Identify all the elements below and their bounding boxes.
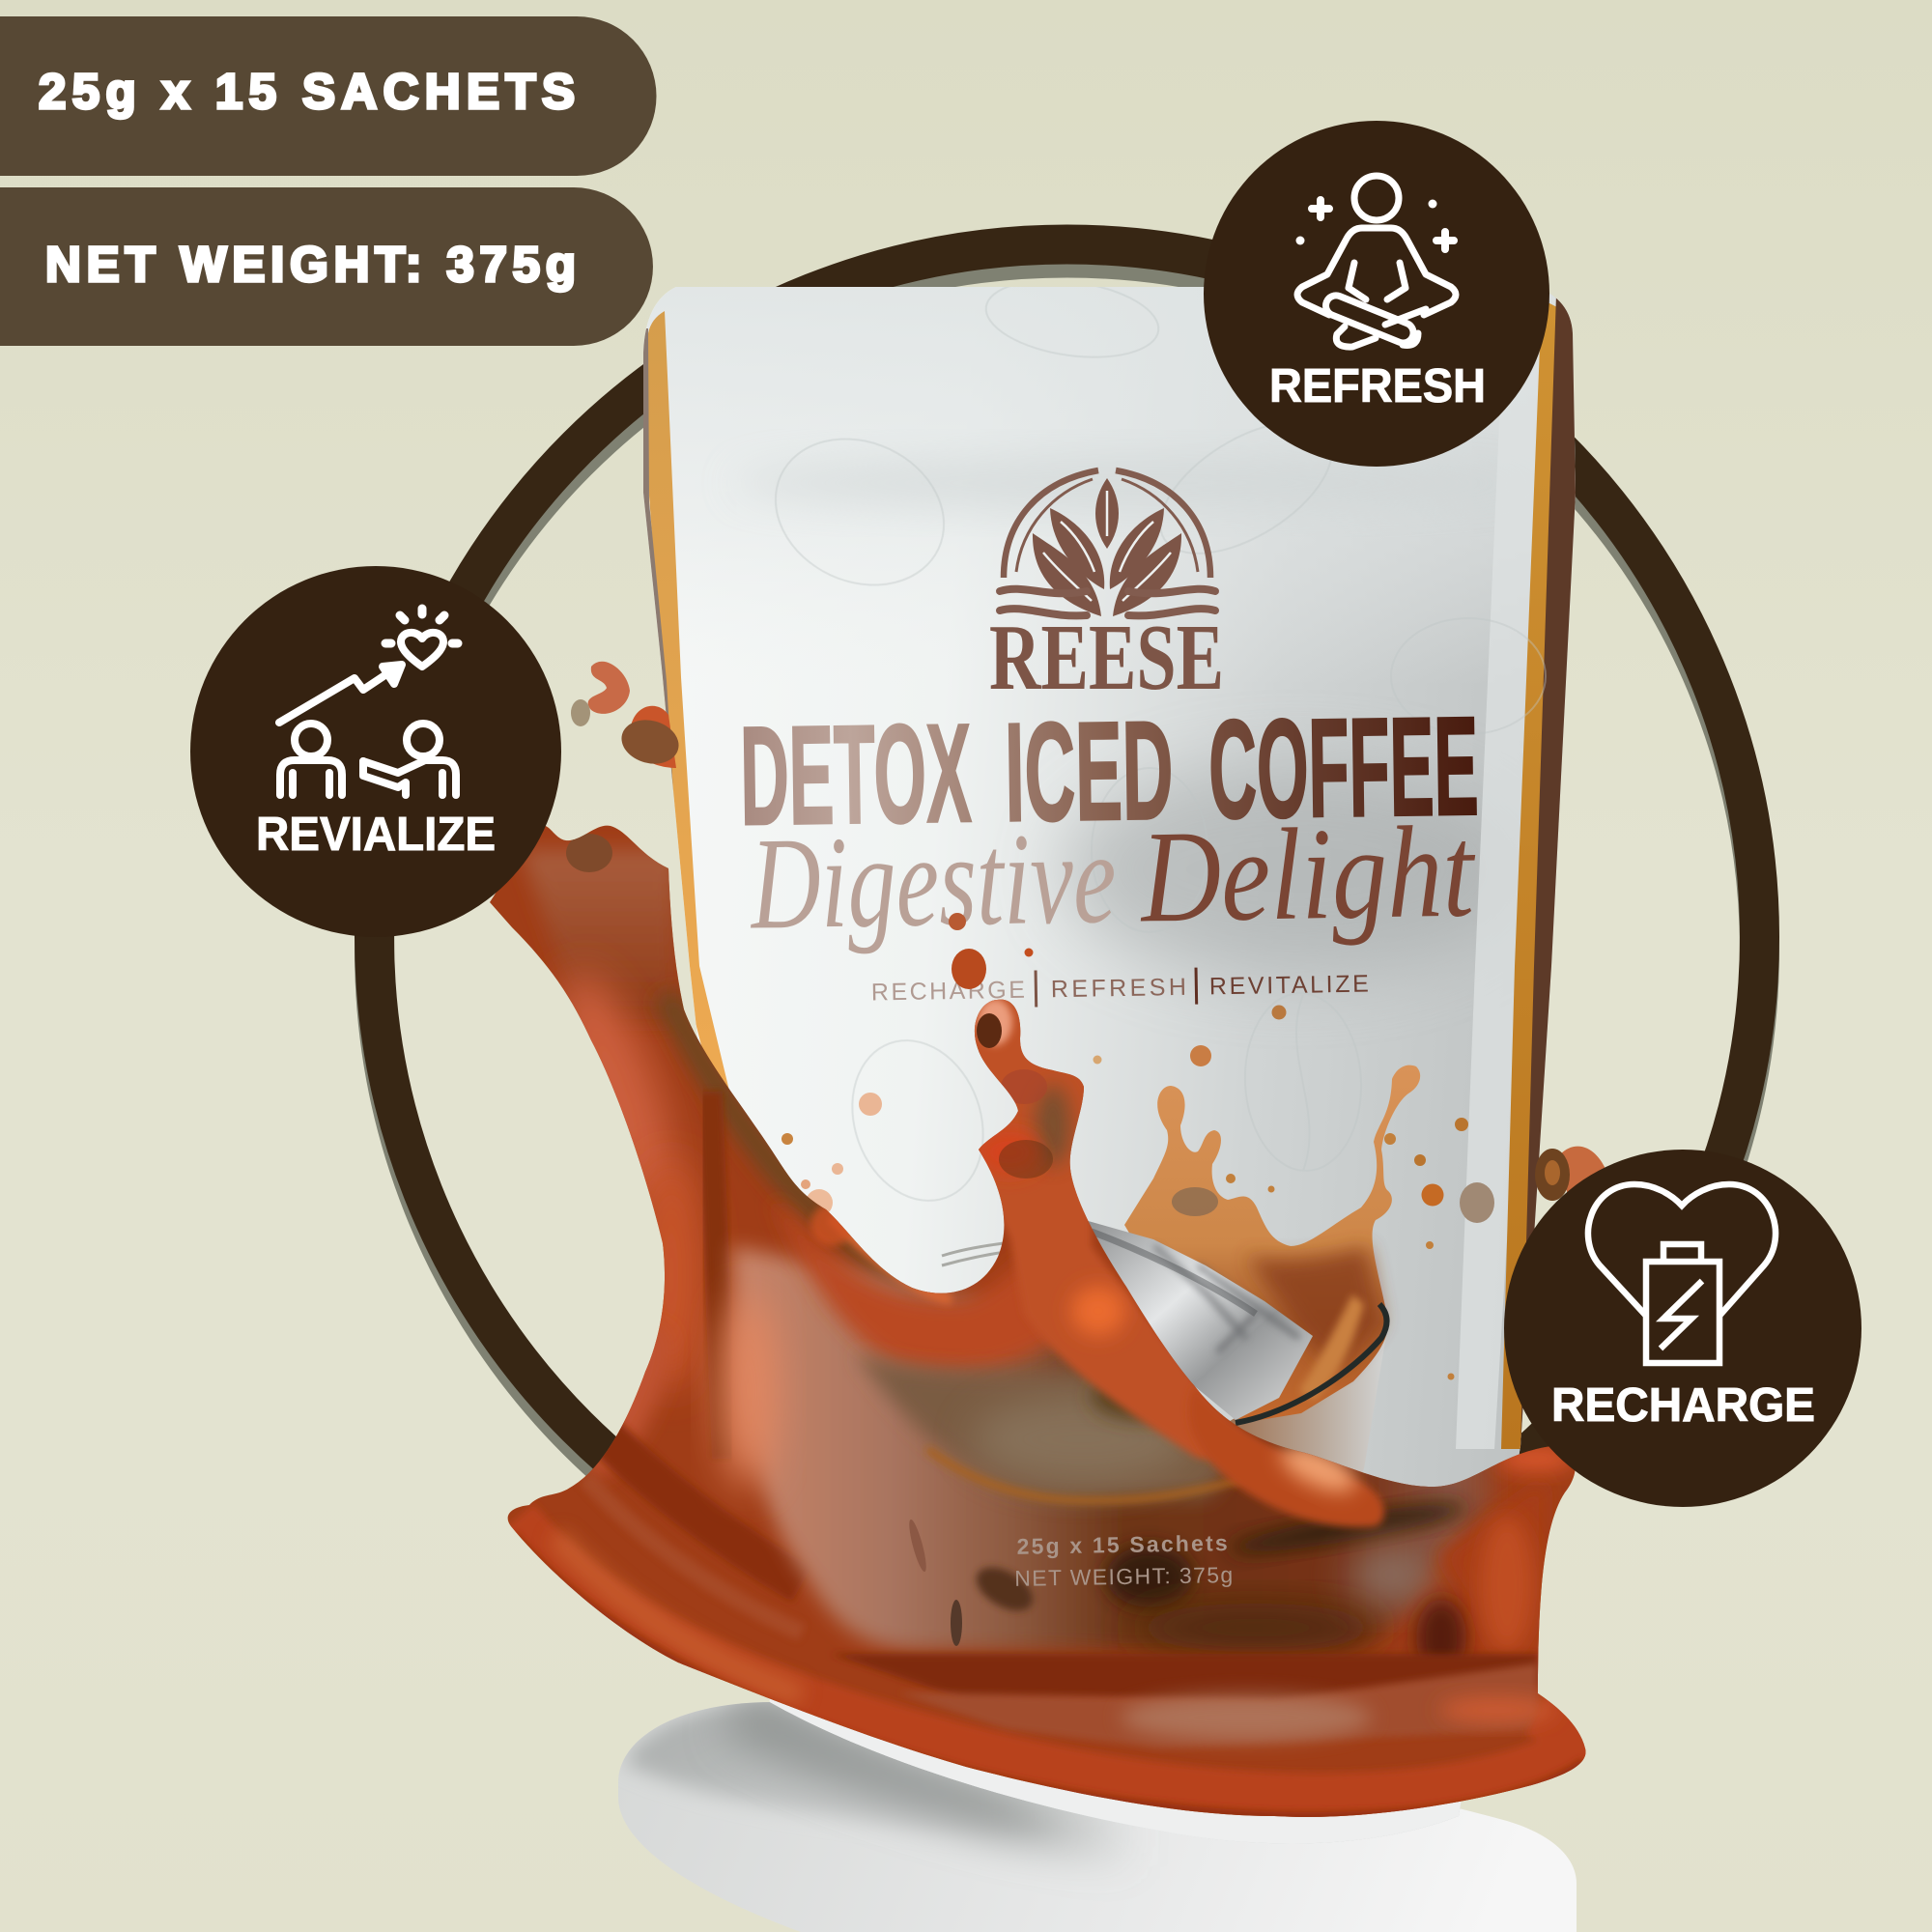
splash: wing below bay [781, 1208, 1052, 1374]
icon: growth arrow, heart and two people [279, 609, 458, 795]
pouch illustration: iced coffee glass [942, 1065, 1420, 1507]
text: COFFEE [1208, 688, 1479, 848]
droplets on pouch [781, 913, 1494, 1379]
badge: refresh [1204, 121, 1549, 467]
pill: sachets count [0, 16, 657, 176]
splash: edge by bay [831, 1217, 952, 1299]
splash: band above rim [831, 1654, 1538, 1700]
heading: DETOX ICED COFFEE [739, 688, 1479, 854]
glass body [1227, 1323, 1388, 1507]
logo: REESE wordmark: REESE [989, 606, 1224, 709]
logo: REESE emblem [1000, 470, 1215, 616]
ring: large circle behind pouch [375, 244, 1760, 1643]
ice cube [1085, 1220, 1313, 1420]
pedestal [618, 1702, 1577, 1932]
pill: net weight: NET WEIGHT: 375g [45, 237, 576, 292]
icon: meditating person [1297, 176, 1456, 347]
tagline: recharge refresh revitalize: REFRESH [1051, 974, 1186, 1003]
splash: dark spots [1106, 1546, 1193, 1607]
splash: lower rim [517, 1519, 1575, 1796]
crown shadow [1246, 1246, 1381, 1372]
pouch: faint bean watermarks [752, 270, 1546, 1219]
subheading: Digestive Delight: Digestive [749, 806, 1118, 957]
subheading: Digestive Delight [749, 799, 1477, 957]
pouch: right wood band [1520, 295, 1577, 1449]
pouch: left gold band [648, 311, 734, 1111]
splash: tinted glass [855, 1352, 1246, 1500]
pouch: white front face [638, 280, 1584, 1845]
label: REVIALIZE [256, 809, 496, 861]
droplet: floating right of pouch [1535, 1147, 1605, 1208]
splash: finger and flowing band [966, 995, 1256, 1459]
label: RECHARGE [1551, 1379, 1815, 1432]
splash: top lobe [522, 850, 676, 1024]
tagline: recharge refresh revitalize: RECHARGE [871, 977, 1025, 1007]
tagline: recharge refresh revitalize [871, 965, 1369, 1010]
glass rim [1236, 1304, 1387, 1423]
pouch text: sachets and net weight [1013, 1530, 1233, 1591]
label: REFRESH [1269, 360, 1486, 412]
tagline: recharge refresh revitalize: REVITALIZE [1209, 971, 1369, 1000]
heading: DETOX ICED COFFEE: DETOX [739, 695, 972, 854]
pill: net weight [0, 187, 653, 346]
splash: ring seen through [599, 1430, 802, 1584]
pouch: left brown edge [643, 328, 674, 794]
splash: left wing highlights [556, 962, 688, 1204]
pouch text: sachets and net weight: 25g x 15 Sachets [1016, 1530, 1228, 1559]
subheading: Digestive Delight: Delight [1138, 799, 1477, 950]
pouch: right seam strip [1456, 467, 1534, 1449]
splash: pouch seen through [732, 1246, 1495, 1650]
pouch text: sachets and net weight: NET WEIGHT: 375g [1014, 1562, 1233, 1591]
splash: right side [1420, 1478, 1546, 1700]
pouch [638, 270, 1584, 1864]
coffee splash [483, 811, 1604, 1835]
badge: recharge [1504, 1150, 1861, 1507]
badge: revitalize [190, 566, 561, 937]
glass rim in bay [942, 1241, 1019, 1265]
heading: DETOX ICED COFFEE: ICED [1004, 692, 1174, 851]
pill: sachets count: 25g x 15 SACHETS [39, 64, 575, 119]
droplets: floating left of pouch [571, 662, 684, 770]
splash: olive streak along upper edge [667, 995, 927, 1299]
pouch: right gold band [1501, 299, 1557, 1449]
icon: heart with battery [1588, 1184, 1776, 1363]
crown splash [1124, 1065, 1420, 1423]
